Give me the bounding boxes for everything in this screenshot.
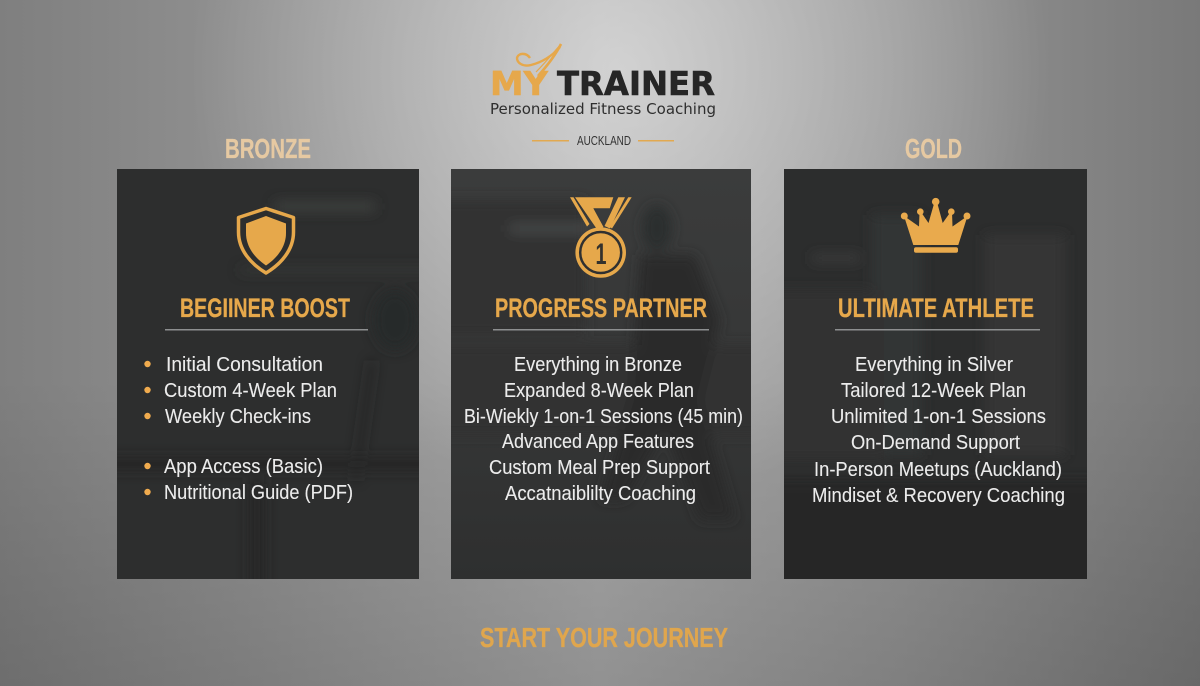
- panel: Gold plan: [784, 169, 1087, 579]
- feature list: Nutritional Guide (PDF): [164, 482, 353, 504]
- logo wordmark: [490, 64, 715, 103]
- icon: logo swoosh: [517, 44, 561, 76]
- icon: medal: [570, 197, 632, 278]
- feature list: [464, 354, 743, 505]
- feature list: [812, 354, 1065, 507]
- call to action: START YOUR JOURNEY: [480, 622, 728, 653]
- feature list: Weekly Check-ins: [165, 406, 311, 428]
- feature list: App Access (Basic): [164, 456, 323, 478]
- feature list: In-Person Meetups (Auckland): [814, 459, 1062, 481]
- icon: medal: 1: [596, 238, 606, 271]
- feature list: Advanced App Features: [502, 431, 694, 453]
- feature list: Custom 4-Week Plan: [164, 380, 337, 402]
- panel: Silver plan: [425, 169, 770, 579]
- icon: crown: [901, 198, 970, 253]
- feature list: Expanded 8-Week Plan: [504, 380, 694, 402]
- feature list: [144, 354, 353, 504]
- feature list: Bi-Wiekly 1-on-1 Sessions (45 min): [464, 406, 743, 428]
- logo wordmark: TRAINER: [557, 64, 715, 103]
- feature list: Everything in Bronze: [514, 354, 682, 376]
- location: Auckland: AUCKLAND: [577, 133, 631, 148]
- logo wordmark: MY: [490, 64, 549, 103]
- icon: shield: [238, 208, 294, 273]
- feature list: Initial Consultation: [166, 354, 323, 376]
- feature list: Tailored 12-Week Plan: [841, 380, 1026, 402]
- plan title: ULTIMATE ATHLETE: [838, 293, 1034, 323]
- feature list: Unlimited 1-on-1 Sessions: [831, 406, 1046, 428]
- logo: My Trainer: [490, 44, 716, 148]
- panel: Bronze plan: [90, 169, 440, 600]
- feature list: Accatnaiblilty Coaching: [505, 483, 696, 505]
- feature list: Mindiset & Recovery Coaching: [812, 485, 1065, 507]
- plan title: BEGIINER BOOST: [180, 293, 350, 323]
- tagline: Personalized Fitness Coaching: [490, 100, 716, 118]
- heading: Bronze: BRONZE: [225, 133, 311, 164]
- feature list: Custom Meal Prep Support: [489, 457, 710, 479]
- heading: Gold: GOLD: [905, 133, 962, 164]
- plan title: PROGRESS PARTNER: [495, 293, 707, 323]
- feature list: Everything in Silver: [855, 354, 1013, 376]
- feature list: On-Demand Support: [851, 432, 1020, 454]
